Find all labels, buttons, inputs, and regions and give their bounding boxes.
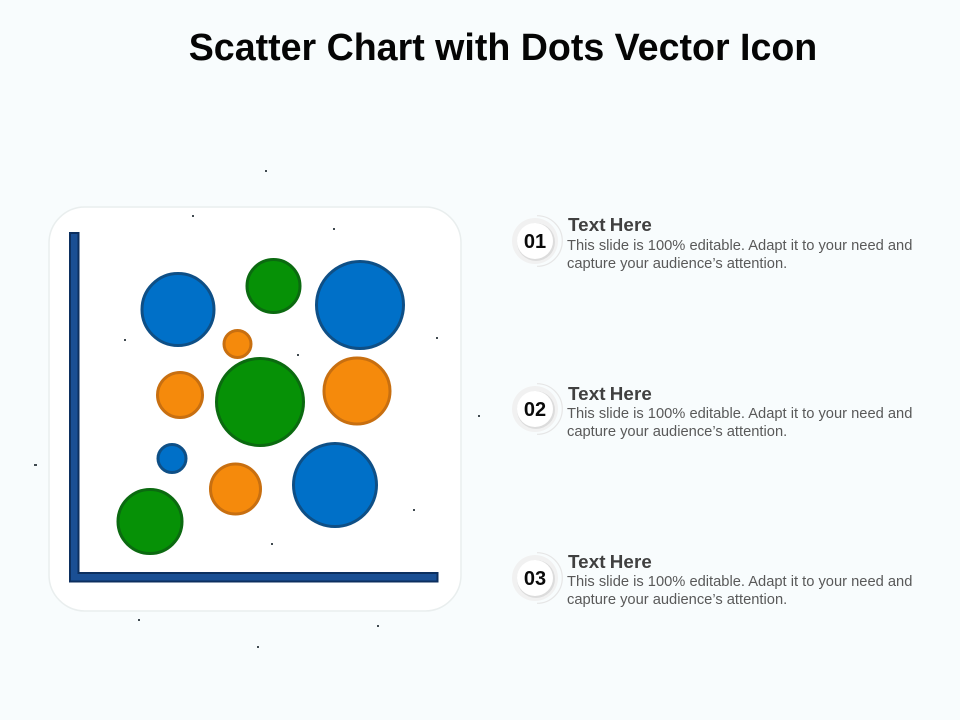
text 01: capture your audience’s attention. bbox=[567, 256, 787, 272]
item 03 bbox=[512, 551, 912, 608]
text 02 bbox=[567, 406, 912, 440]
scatter dots bbox=[118, 260, 404, 554]
number 01: 01 bbox=[524, 231, 546, 253]
badge 03 bbox=[512, 552, 563, 604]
badge 01 bbox=[512, 215, 563, 267]
text 03: This slide is 100% editable. Adapt it to your need and bbox=[567, 574, 912, 590]
text 03: capture your audience’s attention. bbox=[567, 592, 787, 608]
small specks bbox=[34, 170, 480, 648]
text 01 bbox=[567, 238, 912, 272]
text 02: This slide is 100% editable. Adapt it to your need and bbox=[567, 406, 912, 422]
heading 01: Text Here bbox=[568, 214, 652, 235]
item 02 bbox=[512, 383, 912, 440]
text 03 bbox=[567, 574, 912, 608]
heading 03: Text Here bbox=[568, 551, 652, 572]
number 02: 02 bbox=[524, 399, 546, 421]
chart axes bbox=[70, 233, 438, 582]
badge 02 bbox=[512, 383, 563, 435]
number 03: 03 bbox=[524, 568, 546, 590]
title: Scatter Chart with Dots Vector Icon bbox=[189, 26, 817, 68]
text 02: capture your audience’s attention. bbox=[567, 424, 787, 440]
text 01: This slide is 100% editable. Adapt it to your need and bbox=[567, 238, 912, 254]
card background bbox=[49, 207, 461, 611]
heading 02: Text Here bbox=[568, 383, 652, 404]
item 01 bbox=[512, 214, 912, 272]
